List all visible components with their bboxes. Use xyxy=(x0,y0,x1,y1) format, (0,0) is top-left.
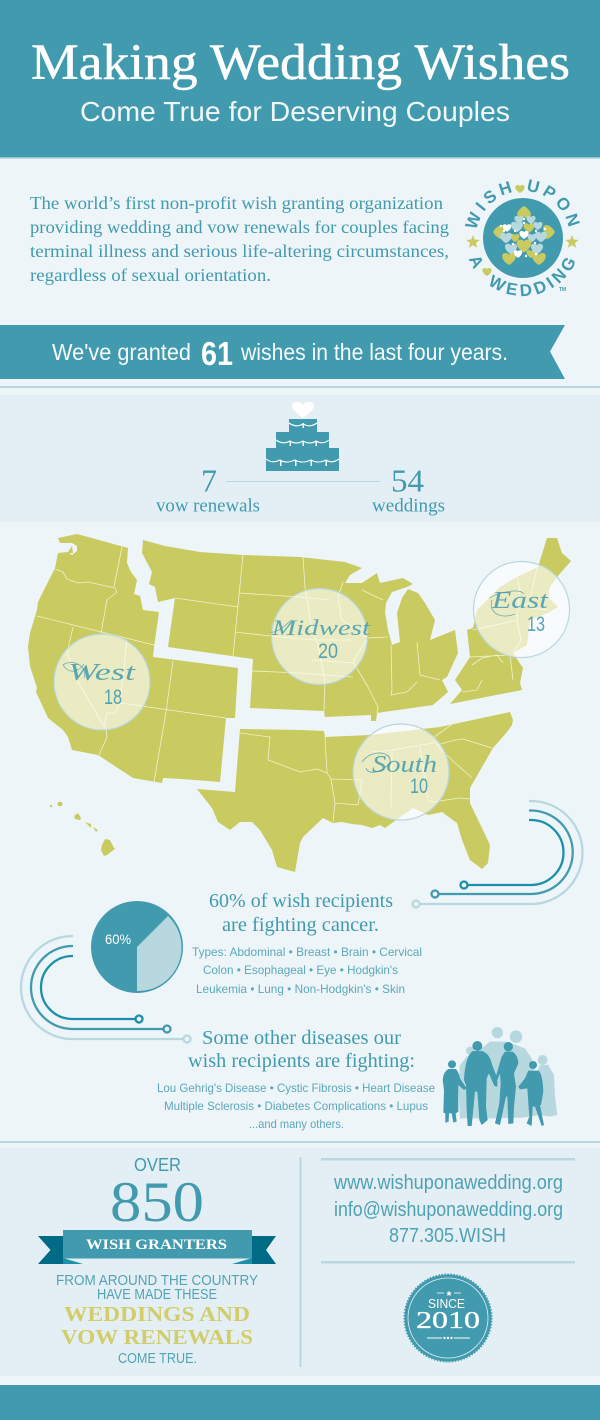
connector lines: pie to other diseases xyxy=(21,936,191,1042)
pie chart: 60% cancer xyxy=(91,901,183,993)
lens: east: East xyxy=(491,588,550,614)
number 61: 61 xyxy=(201,335,233,372)
ribbon banner: wishes granted: We've granted xyxy=(52,339,191,365)
panel: wish totals xyxy=(0,395,600,522)
map region: hawaii xyxy=(50,802,115,856)
text block: from around the country: HAVE MADE THESE xyxy=(97,1287,217,1303)
subtitle: Come True for Deserving Couples xyxy=(80,96,510,127)
lens: midwest: 20 xyxy=(318,640,338,663)
lens: east: 13 xyxy=(527,613,545,636)
panel: footer stats and contact xyxy=(0,1148,600,1376)
lens: east xyxy=(474,562,570,658)
stat: over 850: OVER xyxy=(134,1155,181,1175)
contact details: www.wishuponawedding.org xyxy=(333,1172,563,1194)
map region: west xyxy=(28,534,238,783)
text block: other diseases: Lou Gehrig's Disease • Cystic Fibrosis • Heart Disease xyxy=(157,1081,435,1095)
connector lines: map to cancer stats xyxy=(412,801,582,908)
intro paragraph: regardless of sexual orientation. xyxy=(30,265,271,285)
intro paragraph xyxy=(30,193,449,285)
contact details xyxy=(333,1172,563,1247)
logo: wish upon a wedding: TM xyxy=(559,287,566,293)
stat: weddings xyxy=(372,462,445,516)
stat: vow renewals: vow renewals xyxy=(156,496,260,516)
heading: cancer statistic: 60% of wish recipients xyxy=(209,890,393,912)
badge: since 2010: 2010 xyxy=(416,1308,480,1334)
badge: since 2010: SINCE xyxy=(428,1297,465,1311)
map region: midwest xyxy=(142,540,458,721)
state borders xyxy=(37,547,548,822)
heading: other diseases xyxy=(188,1027,415,1072)
logo: wish upon a wedding: WEDDING xyxy=(490,258,574,296)
ribbon: wish granters xyxy=(38,1230,276,1264)
lens: midwest xyxy=(270,588,371,684)
ribbon banner: wishes granted xyxy=(0,325,565,379)
heading: cancer statistic: are fighting cancer. xyxy=(222,914,379,936)
text block: cancer types xyxy=(192,945,422,996)
pie chart: 60% cancer: 60% xyxy=(105,931,131,947)
lens: south: 10 xyxy=(410,775,428,798)
text block: from around the country: COME TRUE. xyxy=(118,1351,197,1367)
map of United States xyxy=(28,534,571,872)
intro paragraph: The world’s first non-profit wish granting organization xyxy=(30,193,443,213)
lens: south: South xyxy=(372,752,437,778)
contact details: info@wishuponawedding.org xyxy=(334,1199,563,1221)
text block: from around the country: WEDDINGS AND xyxy=(64,1302,250,1326)
heading: other diseases: wish recipients are fighting: xyxy=(188,1050,415,1072)
contact details: 877.305.WISH xyxy=(389,1225,506,1247)
intro paragraph: terminal illness and serious life-altering circumstances, xyxy=(30,241,449,261)
logo: wish upon a wedding: A xyxy=(468,258,482,270)
header banner xyxy=(0,0,600,158)
stat: vow renewals xyxy=(156,462,260,516)
logo: wish upon a wedding xyxy=(464,179,580,296)
ribbon: wish granters: WISH GRANTERS xyxy=(86,1237,227,1253)
text block: cancer types: Colon • Esophageal • Eye • Hodgkin's xyxy=(203,963,398,977)
text block: other diseases xyxy=(157,1081,435,1131)
text block: from around the country xyxy=(56,1273,258,1367)
heading: cancer statistic xyxy=(209,890,393,936)
badge: since 2010 xyxy=(404,1274,492,1362)
stat: vow renewals: 7 xyxy=(201,462,217,498)
text block: from around the country: VOW RENEWALS xyxy=(61,1325,253,1349)
icon: family silhouette xyxy=(443,1027,557,1126)
lens: midwest: Midwest xyxy=(271,615,371,640)
logo: wish upon a wedding: UPON xyxy=(528,179,580,226)
lens: south xyxy=(353,724,449,820)
stat: weddings: weddings xyxy=(372,496,445,516)
map region: south xyxy=(197,712,513,872)
text block: from around the country: FROM AROUND THE COUNTRY xyxy=(56,1273,258,1289)
lens: west: West xyxy=(68,660,137,686)
text block: cancer types: Leukemia • Lung • Non-Hodgkin's • Skin xyxy=(196,982,405,996)
title: Making Wedding Wishes xyxy=(31,35,570,91)
stat: over 850: 850 xyxy=(110,1171,204,1234)
icon: wedding cake xyxy=(266,402,339,471)
lens: west xyxy=(54,634,150,730)
ribbon banner: wishes granted: wishes in the last four years. xyxy=(240,339,508,365)
stat: weddings: 54 xyxy=(391,462,424,498)
text block: other diseases: Multiple Sclerosis • Diabetes Complications • Lupus xyxy=(164,1099,428,1113)
footer bar xyxy=(0,1385,600,1420)
logo: wish upon a wedding: WISH xyxy=(464,181,512,228)
heading: other diseases: Some other diseases our xyxy=(202,1027,401,1049)
text block: cancer types: Types: Abdominal • Breast • Brain • Cervical xyxy=(192,945,422,959)
lens: west: 18 xyxy=(104,686,122,709)
map region: east xyxy=(450,538,571,704)
intro paragraph: providing wedding and vow renewals for couples facing xyxy=(30,217,449,237)
text block: other diseases: ...and many others. xyxy=(249,1117,344,1131)
